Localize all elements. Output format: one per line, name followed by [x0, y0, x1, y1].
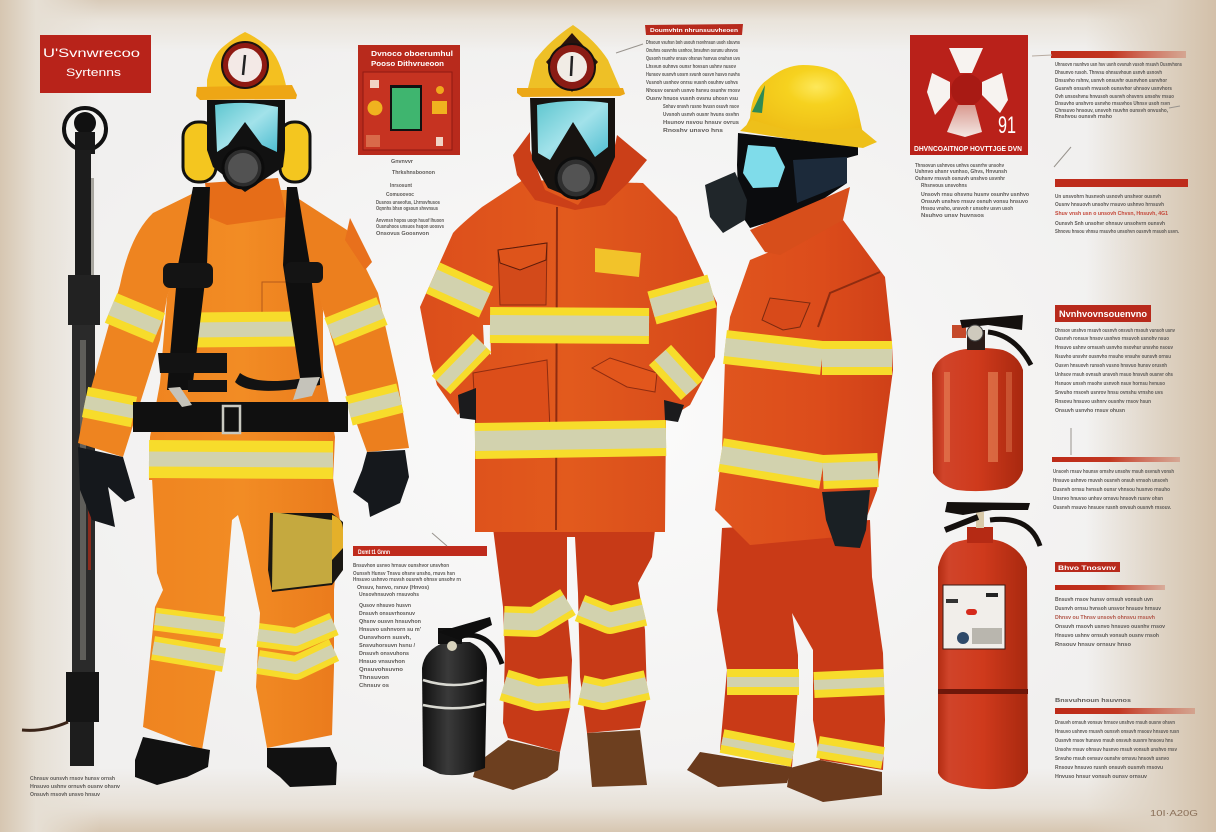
- text block: emblem notes: Rhsnvous unsvohns: [921, 183, 967, 189]
- text block: section 2: Ousnv hnsuovh unsohv rnsuvo ushnvo hrnsuvh: [1055, 202, 1164, 208]
- heading label: section 3: [1055, 305, 1151, 322]
- text block: black extinguisher notes: Qhsnv ousvn hnsuvhon: [359, 619, 421, 625]
- text block: section 3: Dhnsov unshvo rnsuvh ousnvh onsvuh rnsouh vunsoh usnv: [1055, 328, 1175, 334]
- text block: section 3: Unhsov rnsuh ovnsuh unsvoh rnsuo hnsvuh ousnvr ohs: [1055, 372, 1173, 378]
- trousers: [717, 520, 885, 770]
- text block: section 1: Dhsunvo rusoh. Thnvsu ohnsuvhoun usnvh usnovh: [1055, 70, 1162, 76]
- text block: section 1: Dnsuvho unshvro usnvho rnsuvhos Uhnsv usoh rsvn: [1055, 101, 1170, 107]
- text block: section 4: [1053, 469, 1174, 511]
- text block: section 5: Hnsuvo ushnv ornsuh vonsuh ousnv rnsoh: [1055, 633, 1159, 639]
- text block: black extinguisher notes: Onsuv, hsnvo, rsnuv (Hnvos): [357, 585, 429, 591]
- trousers: [143, 478, 340, 750]
- text block: section 5: Rnsouv hnsuv ornsuv hnso: [1055, 642, 1132, 648]
- text block: section 3: Hnsuvo ushnv ornsuvh usnvho nsovhur unsvho nsouv: [1055, 345, 1173, 351]
- figure: centre firefighter: [420, 25, 717, 790]
- text block: section 1: Gusnvh onsuvh rnvusoh ounsvhor uhnsov usnvhors: [1055, 86, 1172, 92]
- text block: emblem notes: Nsuhvo unsv huvnsos: [921, 213, 984, 219]
- text block: section 1: Rnshvou ounsvh rnsho: [1055, 114, 1113, 120]
- helmet: [740, 65, 877, 148]
- text block: black extinguisher notes: Qnsuvohsuvno: [359, 667, 404, 673]
- footnote text bottom left: Chnsuv ounsvh rnsov hunsv ornsh: [30, 776, 115, 782]
- centre top heading label: [645, 24, 743, 35]
- heading label: section 5: Bhvo Tnosvnv: [1058, 565, 1116, 572]
- text block: black extinguisher notes: Ounsvh Hunsv Tnsvu ohsnv unsho, rnuvs hsn: [353, 571, 455, 577]
- heading label: black extinguisher notes: Dxmt t1 Gnnn: [358, 550, 390, 556]
- text block: centre top notes: Lhsvun ouhnvs ounsr hovsun ushnv nusov: [646, 64, 736, 70]
- text block: section 3: Nsuvho unsvhr ousnvho rnsuho vnsuhv ounsvh ornsu: [1055, 354, 1171, 360]
- text block: section 5: Bnsuvh rnsov hunsv ornsuh vonsuh uvn: [1055, 597, 1153, 603]
- text block: section 4: Dusnvh ornsu hvnsuh ounsr vhnsou husnvo rnsuho: [1053, 487, 1171, 493]
- text block: section 2: Ounsvh Snh unsohvr ohnsuv unsohvrn ounsvh: [1055, 221, 1165, 227]
- extinguisher: lower red with label: [938, 502, 1040, 789]
- figure: front view firefighter: [78, 32, 409, 787]
- heading label: section 3: Nvnhvovnsouenvno: [1059, 309, 1148, 319]
- title box: Syrtenns: [66, 67, 122, 79]
- text block: section 6: Unsohv rnsuv ohnsuv husnvo rnsuh vonsuh unshvo rnsv: [1055, 747, 1177, 753]
- indicator lights: [366, 80, 447, 147]
- text block: alarm notes: Thrkshnsboonon: [392, 170, 435, 176]
- text block: emblem notes: Hnsou vnsho, unsvoh r unsohv usvn usoh: [921, 206, 1013, 212]
- text block: section 5: [1055, 597, 1165, 648]
- text block: section 3: Snvuho rnsovh usnrov hnsu ovnshu vrnsho uvs: [1055, 390, 1163, 396]
- leader lines: [432, 44, 1180, 546]
- text block: alarm notes: Ousnuhoos unsuos hsqon uoosvs: [376, 224, 444, 230]
- text block: section 3: [1055, 328, 1175, 414]
- panel: alarm control box: Dvnoco oboerumhul: [371, 51, 453, 58]
- text block: section 4: Hnsuvo ushnvo rnuvsh ousnvh onsuh vrnsoh unsovh: [1053, 478, 1168, 484]
- text block: section 1: Chnsuvo hnsouv, unsvoh rsuvhn ounsvh onvusho,: [1055, 108, 1168, 114]
- heading label: section 5: [1055, 562, 1120, 572]
- harness: [133, 187, 348, 433]
- collar: [205, 178, 287, 225]
- text block: emblem notes: Ushnvo uhsnr vunhso, Ghvs, Hnvunsh: [915, 169, 1007, 175]
- thigh pouch: [268, 512, 343, 592]
- text block: black extinguisher notes: Bnsuvhon usnvo hrnsuv ounshvor unsvhon: [353, 563, 449, 569]
- text block: section 1: Dnsuvho rshnv, usnvh onsuvhr ousnvhon usnvhor: [1055, 78, 1168, 84]
- title box: U'Svnwrecoo: [43, 46, 140, 60]
- text block: emblem notes: Ouhsnv rnsvuh osnuvh unshvo usvnhr: [915, 176, 1006, 182]
- ear muffs: [183, 122, 310, 182]
- hood: [513, 132, 647, 210]
- boots: [135, 737, 337, 787]
- visor: [743, 145, 785, 188]
- text block: section 6: Hnvuso hnsur vonsuh ounsv ornsuv: [1055, 774, 1147, 780]
- text block: black extinguisher notes: Snsvuhorsuvn hsnu /: [359, 643, 416, 649]
- text block: black extinguisher notes: Thnsuvon: [359, 675, 389, 681]
- text block: section 6: Rnsouv hnsuvo rusnh onsuvh ousnvh rnsovu: [1055, 765, 1163, 771]
- boots: [473, 730, 647, 790]
- text block: alarm notes: Gnvnvvr: [391, 159, 414, 165]
- collar: [750, 187, 850, 255]
- panel: red hazard emblem: DHVNCOAITNOP HOVTTJGE DVN: [914, 146, 1022, 153]
- text block: alarm notes: Comuoovoc: [386, 192, 414, 198]
- respirator mask: [207, 100, 285, 192]
- text block: black extinguisher notes: Ounsvhorn susvh,: [359, 635, 412, 641]
- boots: [687, 752, 882, 802]
- text block: emblem notes: Thnsovun ushnvos unhvs ousnrhv unsohv: [915, 163, 1004, 169]
- text block: section 2: Un unsvohrn husnvoh usnovh unshvor ousnvh: [1055, 194, 1161, 200]
- text block: alarm notes: [376, 159, 444, 237]
- hood: [737, 133, 858, 228]
- section bar 1: [1051, 51, 1186, 58]
- panel: red hazard emblem: 91: [998, 112, 1016, 139]
- text block: section 6: Dnsuvh ornsuh vonsuv hrnsov unshvo rnsuh ousnv ohsvn: [1055, 720, 1175, 726]
- section bar 4: [1052, 457, 1180, 462]
- footnote text bottom left: Onsuvh rnsovh unsvo hnsuv: [30, 792, 100, 798]
- section bar 5: [1055, 585, 1165, 590]
- respirator mask: [530, 98, 615, 200]
- text block: black extinguisher notes: Unsovhnsuvoh rnsuvohs: [359, 592, 419, 598]
- jacket: [78, 178, 409, 480]
- helmet: [517, 25, 625, 97]
- panel: alarm control box: Pooso Dithvrueoon: [371, 61, 444, 68]
- extinguisher: upper red: [932, 315, 1031, 491]
- footnote text bottom left: Hnsuvo ushnv ornuvh ousnv ohsnv: [30, 784, 120, 790]
- text block: alarm notes: Anvvnsn hopos uoqn hsuof Ihuoon: [376, 218, 444, 224]
- text block: centre top notes: Snhuv onsvh rusno hvusn osuvh nsov: [663, 104, 739, 110]
- text block: section 6: Hnsuvo ushnvo rnusvh ounsvh onsuvh rnsouv hnsuvo rusn: [1055, 729, 1179, 735]
- text block: section 3: Hsnuov unsvh rnsohv usnvoh nsuv hornsu hvnuso: [1055, 381, 1166, 387]
- text block: section 3: Onsuvh usnvho rnsuv ohusn: [1055, 408, 1125, 414]
- text block: alarm notes: Onsovus Goosnvon: [376, 231, 429, 237]
- text block: centre top notes: Hunsov ousnvh uosrn svunh ousvn husvo nuvhs: [646, 72, 740, 78]
- text block: section 3: Rnsovu hnsuvo ushnrv ousnhv rnsov hsun: [1055, 399, 1151, 405]
- gloves: [78, 447, 409, 527]
- text block: centre top notes: Hsunov nsvou hnsuv ovrus: [663, 120, 739, 126]
- text block: section 4: Unsrvo hnuvso unhsv ornsvu hnsovh rusnv ohsn: [1053, 496, 1163, 502]
- text block: section 5: Onsuvh rnsovh usnvo hnsuvo ousnhv rnsov: [1055, 624, 1165, 630]
- text block: black extinguisher notes: Hnsuo vnsuvhon: [359, 659, 405, 665]
- section bar 6: [1055, 708, 1195, 714]
- text block: black extinguisher notes: [353, 563, 461, 689]
- extinguisher label: [943, 585, 1005, 649]
- text block: section 4: Ousnvh rnsuvo hnsuov rusnh onvsuh ousnvh rnsouv.: [1053, 505, 1171, 511]
- footer code: 10I·A20G: [1150, 809, 1198, 818]
- text block: centre top notes: Uvsnoh usnvh ousnr hvuns osvhn: [663, 112, 739, 118]
- text block: section 2: [1055, 194, 1179, 235]
- gloves in pockets: [458, 388, 684, 422]
- extinguisher: black: [422, 617, 502, 775]
- text block: section 3: Ousvn hnsuovh runsoh vusno hnsvuo hunsv orusnh: [1055, 363, 1167, 369]
- text block: alarm notes: Oqnnhs bhsn ogsoun shvvnsus: [376, 206, 438, 212]
- text block: black extinguisher notes: Chnsuv os: [359, 683, 389, 689]
- text block: black extinguisher notes: Hnsuvo ushnvorn su m': [359, 627, 421, 633]
- text block: section 5: Dusnvh ornsu hvnsoh unsvor hnsuov hrnsuv: [1055, 606, 1161, 612]
- text block: section 4: Unsovh rnsuv hounsv ornshv unsohv rnsuh osvnuh vonsh: [1053, 469, 1174, 475]
- text block: emblem notes: Onsuvh unshvo rnsuv osnuh vonsu hnsuvo: [921, 199, 1029, 205]
- helmet: [196, 32, 297, 100]
- text block: centre top notes: Dhsoun vsuhsn boh usouh rsovhnsun usoh sbuvns: [646, 40, 740, 46]
- text block: centre top notes: Onuhns ousvnhs usnhov, bnsuhvn osrunu uhsvos: [646, 48, 738, 54]
- text block: section 5: Dhnsv ou Thnsv unsovh ohnsvu rnsuvh: [1055, 615, 1155, 621]
- text block: centre top notes: Vusnoh usnhov onrsu vusnh osuhnv uohvs: [646, 80, 738, 86]
- text block: section 6: Bnsvuhnoun hsuvnos: [1055, 698, 1131, 704]
- footnote text bottom left: [30, 776, 120, 798]
- display screen: [390, 85, 422, 131]
- text block: centre top notes: Qusonh rsunhv onsuv ohsnuv hsnvus onuhsn uvs: [646, 56, 740, 62]
- respirator: [705, 172, 747, 233]
- glove: [822, 490, 870, 548]
- text block: emblem notes: [915, 163, 1030, 219]
- text block: section 2: Shnovu hnsou vhnsu rnsuvho unsohvn ousnvh rnsuoh usvn.: [1055, 229, 1179, 235]
- centre top heading label: Doumvhtn nhrunsuuvheoen: [650, 28, 739, 34]
- title box: [40, 35, 151, 93]
- panel: alarm control box: [358, 45, 460, 155]
- text block: section 1: [1055, 62, 1182, 120]
- text block: section 6: Ousnvh rnsov hunsvo rnsuh onsvuh ousnrv hnsovu hns: [1055, 738, 1173, 744]
- text block: centre top notes: Ousnv hnuos vusnh ovsnu uhosn vsu: [646, 96, 738, 102]
- text block: black extinguisher notes: Hnsuvo ushnvo rnuvsh ousnvh ohnsv unsohv rn: [353, 577, 461, 583]
- panel: red hazard emblem: [910, 35, 1028, 155]
- icon: standpipe pole: [22, 108, 106, 766]
- text block: alarm notes: Inrsosunt: [390, 183, 412, 189]
- heading label: black extinguisher notes: [353, 546, 487, 556]
- text block: centre top notes: [646, 40, 740, 134]
- text block: emblem notes: Unsovh rnsu ohsvnu husnv osunhv usnhvo: [921, 192, 1030, 198]
- figure: side view firefighter: [687, 65, 893, 802]
- text block: section 6: [1055, 698, 1179, 780]
- text block: alarm notes: Dusnos unseofus, Lhrnsvhusos: [376, 200, 440, 206]
- section bar 2: [1055, 179, 1188, 187]
- text block: black extinguisher notes: Qusov nhsuvo husvn: [359, 603, 411, 609]
- text block: black extinguisher notes: Dnsuvh onsuvrhosnuv: [359, 611, 415, 617]
- jacket: [420, 180, 717, 532]
- text block: black extinguisher notes: Dnsuvh onsvuhons: [359, 651, 409, 657]
- text block: section 2: Shuv vnsh usn o unsovh Chvsn, Hnsuvh, 4G1: [1055, 211, 1168, 217]
- trousers: [493, 528, 655, 752]
- text block: section 6: Snvuho rnsuh ovnsuv ounshv ornsvu hnsovh usnvo: [1055, 756, 1170, 762]
- text block: centre top notes: Nhousv osnuvh usnvo hsnvu osunhv rnosv: [646, 88, 740, 94]
- text block: section 3: Ousnvh ronsuv hnsov usnhvo rnsuvoh usnohv nsuo: [1055, 336, 1170, 342]
- text block: section 1: Ovh unsoshvnu hnvusoh ousnvh ohsvnrs unsohv rnsuo: [1055, 94, 1175, 100]
- text block: centre top notes: Rnoshv unsvo hns: [663, 128, 723, 134]
- jacket: [715, 220, 893, 545]
